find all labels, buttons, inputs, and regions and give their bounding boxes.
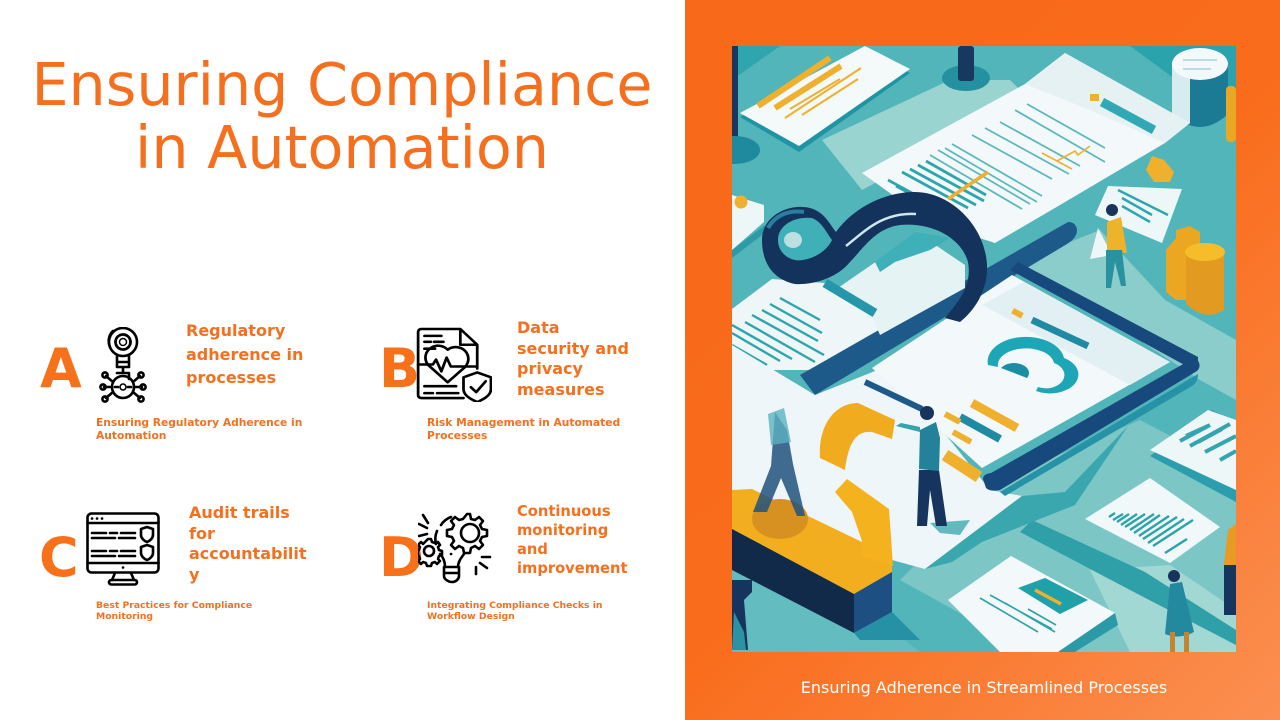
heading D: Continuous [517,503,611,520]
tablet frame corner [983,357,1200,491]
gold cylinders [1166,226,1225,315]
heading C [189,503,307,584]
title: Ensuring Compliance [31,51,653,119]
heading D: improvement [517,560,627,577]
description C: Monitoring [96,611,153,622]
heading A: processes [186,368,276,387]
left edge doc with yellow lock [732,195,766,258]
figure legs at top [710,46,990,164]
yellow padlock block [732,403,920,640]
bottom right figures [732,524,1236,652]
heading C: y [189,565,199,584]
heading D [517,503,628,577]
letter C: C [39,526,79,589]
paper sheet left [732,279,908,370]
panel: B data security [379,318,629,442]
description C [96,600,252,622]
description D: Integrating Compliance Checks in [427,600,602,611]
person on paper [896,406,970,535]
heading C: for [189,524,215,543]
panel: orange image panel [685,0,1280,720]
heading D: monitoring [517,522,608,539]
description B [427,416,620,442]
description D [427,600,602,622]
paper fold [925,426,1128,569]
tablet screen [865,275,1170,477]
panel: C audit trails [39,503,307,622]
heading A [186,321,303,387]
paper inside ribbon loop [825,232,965,335]
dark ribbon loop [762,192,987,322]
panel: A regulatory adherence [40,321,303,442]
letter B: B [379,337,420,400]
icon: bulb with gears [418,512,492,584]
right chart documents [1150,410,1236,502]
upper tablet arm [800,222,1077,395]
heading B: security and [517,339,629,358]
description B: Risk Management in Automated [427,416,620,429]
panel: D continuous monitoring [379,503,628,622]
woman with paper [1090,186,1182,288]
bottom document [948,556,1118,652]
icon: monitor with shields [86,512,160,586]
title [31,51,653,182]
letter D: D [379,526,424,589]
description D: Workflow Design [427,611,515,622]
big document [862,53,1190,243]
illustration: isometric compliance documents [732,46,1236,652]
description A [96,416,302,442]
icon: light bulb with gear and circuit [99,327,147,403]
heading B: measures [517,380,604,399]
main paper lower [732,345,1022,569]
heading C: Audit trails [189,503,290,522]
description B: Processes [427,429,487,442]
heading C: accountabilit [189,544,307,563]
icon: medical document with shield [416,328,492,402]
description A: Ensuring Regulatory Adherence in [96,416,302,429]
cylinder top right [1172,48,1236,142]
left top document [740,46,910,152]
heading D: and [517,541,548,558]
heading A: Regulatory [186,321,285,340]
image caption: Ensuring Adherence in Streamlined Processes [801,678,1167,697]
heading B [517,318,629,399]
ghost person on block [753,408,805,516]
letter A: A [40,337,82,400]
heading A: adherence in [186,344,303,364]
title: in Automation [135,114,549,182]
yellow tag [1146,156,1174,182]
description A: Automation [96,429,166,442]
description C: Best Practices for Compliance [96,600,252,611]
heading B: Data [517,318,560,337]
heading B: privacy [517,359,583,378]
